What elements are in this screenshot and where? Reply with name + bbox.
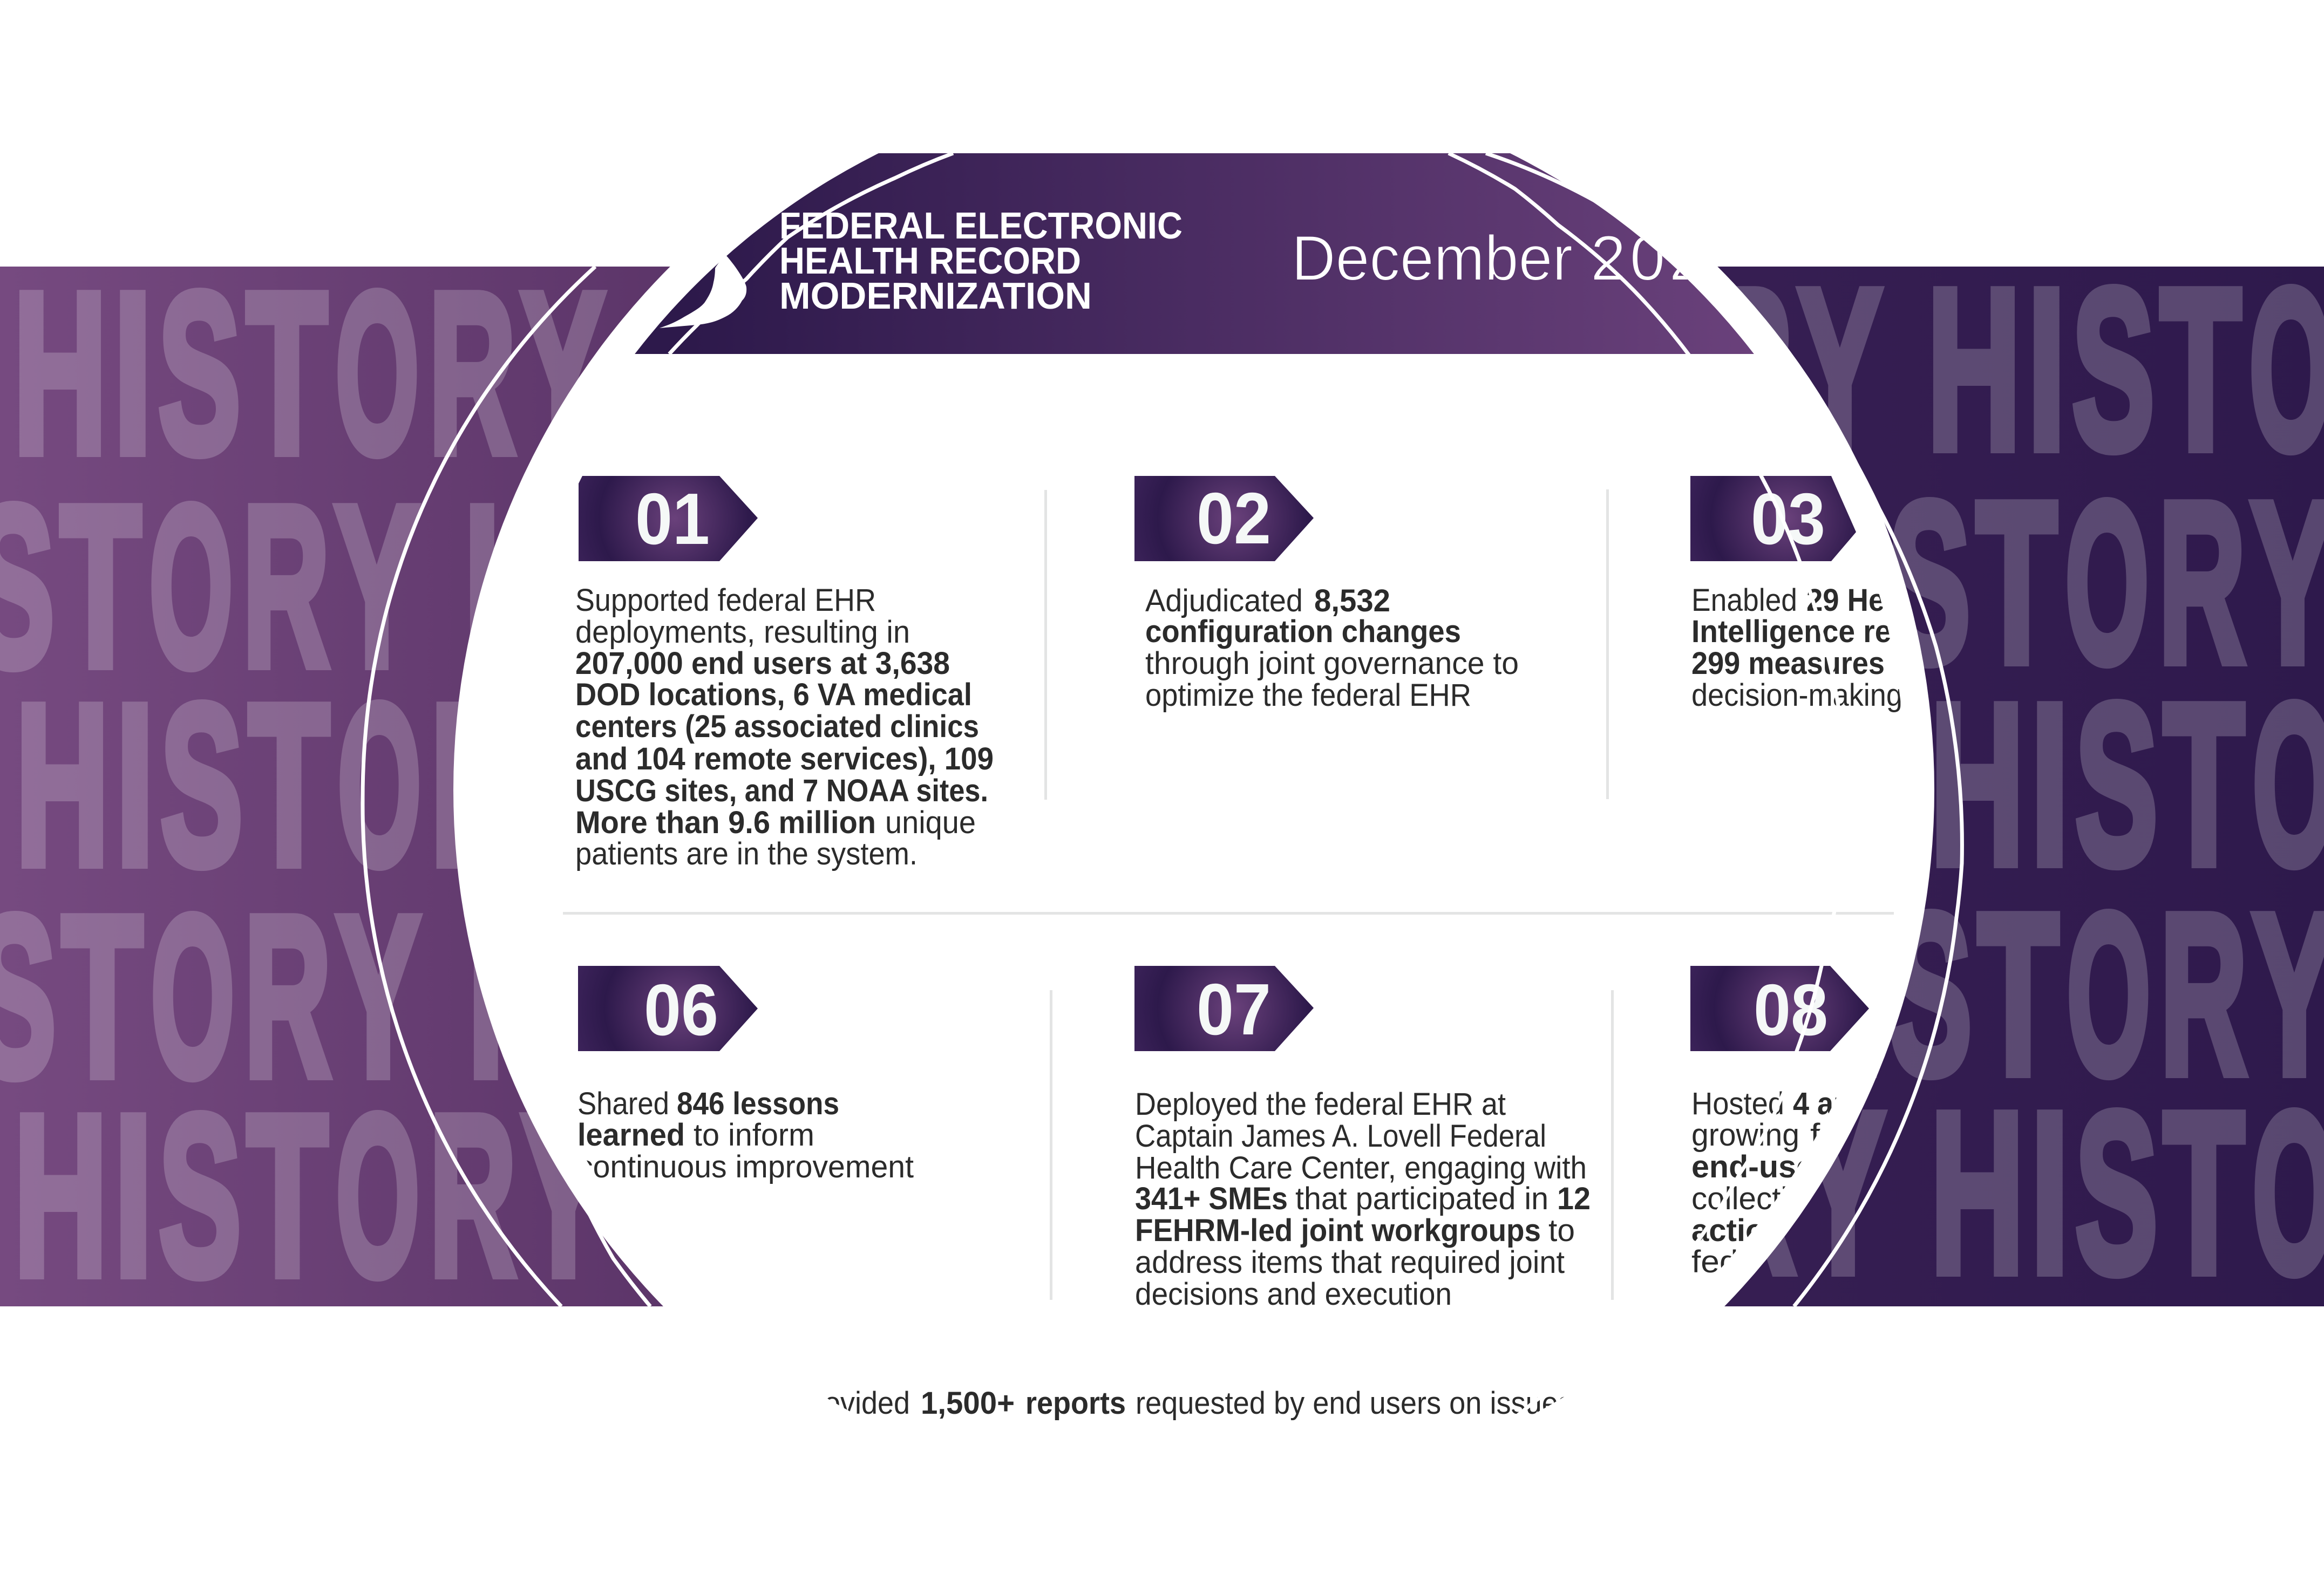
HISTORY watermark text, left side: O: [336, 1068, 420, 1324]
panel: item 01: [575, 476, 994, 871]
background purple band: [0, 267, 2324, 1306]
HISTORY watermark text, left side: T: [60, 459, 141, 714]
date: 2022: [1591, 223, 1744, 294]
HISTORY watermark text, right side: S: [1890, 867, 1972, 1122]
HISTORY watermark text, left side: S: [609, 459, 691, 714]
thin white inner arc, bottom left: [588, 1212, 650, 1306]
HISTORY watermark text, right side: I: [1394, 657, 1432, 912]
HISTORY watermark text, left side: I: [114, 246, 152, 501]
HISTORY watermark text, left side: R: [429, 1067, 517, 1323]
text 01: deployments, resulting in: [575, 615, 910, 650]
text 07: address items that required joint: [1135, 1245, 1565, 1280]
panel: item 07: [1134, 966, 1591, 1312]
HISTORY watermark text, left side: T: [697, 459, 778, 714]
thin white outer arc, left: [363, 267, 595, 1306]
HISTORY watermark text, right side: I: [2028, 242, 2065, 498]
text 08: growing: [1691, 1118, 1799, 1153]
HISTORY watermark text, right side: S: [2075, 1066, 2158, 1321]
panel: item 08: [1690, 966, 1869, 1272]
HISTORY watermark text, left side: R: [242, 458, 330, 714]
HISTORY watermark text, right side: T: [1978, 867, 2059, 1122]
HISTORY watermark text, left side: S: [613, 869, 695, 1125]
HISTORY watermark text, right side: O: [1615, 657, 1700, 912]
HISTORY watermark text, right side: R: [2160, 866, 2247, 1122]
HISTORY watermark text, left side: H: [13, 245, 107, 501]
HISTORY watermark text, right side: Y: [1615, 866, 1700, 1122]
badge 06: 06: [644, 969, 718, 1051]
text 01: Supported federal EHR: [575, 583, 876, 618]
HISTORY watermark text, right side: O: [2065, 455, 2149, 711]
HISTORY watermark text, right side: R: [1521, 454, 1609, 710]
text 02: Adjudicated: [1145, 583, 1303, 618]
HISTORY watermark text, right side: H: [1927, 241, 2021, 497]
HISTORY watermark text, left side: S: [158, 246, 241, 501]
HISTORY watermark text, right side: T: [1341, 867, 1422, 1122]
date: [1297, 234, 1689, 281]
text 08: action: [1691, 1213, 1784, 1248]
text 08: 4 annual: [1793, 1086, 1911, 1121]
text 01: 207,000 end users at 3,638: [575, 646, 950, 681]
thin white arc, top right sliver: [1486, 153, 1598, 202]
badge 03: [1690, 476, 1856, 561]
HISTORY watermark text, right side: S: [1253, 867, 1335, 1122]
HISTORY watermark text, right side: I: [1208, 867, 1246, 1122]
HISTORY watermark text, right side: [1106, 241, 2324, 1321]
HISTORY watermark text, right side: R: [2158, 454, 2246, 710]
text 06: Shared: [577, 1086, 669, 1121]
text 02: 8,532: [1314, 583, 1390, 618]
text 07: [1135, 1087, 1591, 1312]
HISTORY watermark text, left side: R: [431, 657, 518, 912]
HISTORY watermark text, left side: H: [14, 1067, 107, 1323]
bottom text: reports: requested by end users on issues: [1136, 1386, 1573, 1421]
text 08: focus on: [1810, 1118, 1945, 1153]
HISTORY watermark text, right side: S: [1435, 242, 1518, 498]
HISTORY watermark text, right side: T: [1526, 657, 1608, 912]
title: MODERNIZATION: [779, 275, 1092, 317]
HISTORY watermark text, left side: I: [565, 459, 602, 714]
HISTORY watermark text, left side: S: [160, 658, 243, 913]
badge 06: [578, 966, 758, 1051]
HISTORY watermark text, right side: I: [1391, 242, 1429, 498]
text 07: Deployed the federal EHR at: [1135, 1087, 1506, 1122]
HISTORY watermark text, left side: O: [151, 869, 235, 1125]
text 01: More than 9.6 million: [575, 805, 876, 840]
thin white inner arc, right: [1449, 153, 1846, 1425]
HISTORY watermark text, right side: O: [1430, 867, 1514, 1122]
text 06: learned: [577, 1118, 685, 1153]
HISTORY watermark text, left side: I: [116, 657, 154, 913]
bottom text: reports: reports: [1025, 1386, 1126, 1421]
HISTORY watermark text, left side: I: [114, 1068, 152, 1324]
HISTORY watermark text, right side: H: [1294, 656, 1387, 912]
HISTORY watermark text, right side: T: [1523, 242, 1605, 498]
text 01: DOD locations, 6 VA medical: [575, 677, 972, 712]
HISTORY watermark text, right side: I: [1844, 455, 1881, 711]
text 07: Health Care Center, engaging with: [1135, 1150, 1587, 1185]
HISTORY watermark text, right side: S: [1438, 1066, 1521, 1321]
text 07: Captain James A. Lovell Federal: [1135, 1119, 1546, 1154]
panel: item 06: [577, 966, 914, 1184]
HISTORY watermark text, right side: S: [2072, 242, 2155, 498]
HISTORY watermark text, left side: T: [62, 869, 143, 1125]
HISTORY watermark text, left side: Y: [336, 868, 420, 1124]
HISTORY watermark text, left side: H: [16, 657, 109, 912]
HISTORY watermark text, left side: I: [568, 869, 606, 1125]
HISTORY watermark text, right side: Y: [1801, 656, 1885, 912]
icon: white crescent logo: [660, 255, 746, 328]
text 08: federal: [1691, 1244, 1794, 1279]
HISTORY watermark text, right side: H: [1108, 866, 1201, 1122]
panel: item 03: [1690, 476, 1901, 712]
HISTORY watermark text, right side: T: [1339, 455, 1421, 711]
HISTORY watermark text, right side: H: [1106, 454, 1200, 710]
badge 08: [1690, 966, 1869, 1051]
text 07: decisions and execution: [1135, 1277, 1452, 1312]
HISTORY watermark text, right side: O: [1612, 242, 1696, 498]
HISTORY watermark text, left side: T: [248, 657, 330, 913]
badge 02: [1134, 476, 1314, 561]
text 06: [577, 1086, 914, 1184]
bottom text: reports: 1,500+: [921, 1386, 1015, 1421]
HISTORY watermark text, right side: T: [2160, 242, 2241, 498]
HISTORY watermark text, left side: Y: [523, 657, 607, 912]
HISTORY watermark text, left side: R: [879, 458, 967, 714]
title: [779, 205, 1183, 317]
text 03: decision-making: [1691, 678, 1902, 713]
HISTORY watermark text, right side: R: [1709, 656, 1796, 912]
HISTORY watermark text, right side: Y: [1614, 454, 1698, 710]
HISTORY watermark text, right side: T: [2163, 657, 2245, 912]
text 03: 299 measures: [1691, 646, 1885, 681]
text 02: through joint governance to: [1145, 646, 1519, 681]
HISTORY watermark text, right side: R: [1709, 1065, 1796, 1320]
HISTORY watermark text, right side: S: [1888, 455, 1970, 711]
HISTORY watermark text, right side: I: [2031, 1065, 2069, 1321]
HISTORY watermark text, left side: R: [429, 245, 516, 501]
HISTORY watermark text, right side: H: [1931, 1065, 2024, 1320]
text 03: [1693, 588, 1901, 712]
HISTORY watermark text, left side: Y: [975, 868, 1059, 1124]
text 06: to inform: [694, 1118, 814, 1153]
HISTORY watermark text, left side: H: [468, 868, 561, 1124]
bottom text: reports: [795, 1386, 1573, 1421]
HISTORY watermark text, right side: H: [1290, 241, 1384, 497]
white central circle: [453, 50, 1934, 1530]
bottom text: reports: Provided: [795, 1386, 910, 1421]
text 07: to: [1548, 1213, 1575, 1248]
HISTORY watermark text, right side: I: [1845, 867, 1883, 1122]
HISTORY watermark text, right side: T: [1976, 455, 2057, 711]
badge 07: 07: [1197, 969, 1271, 1050]
banner shape: [594, 153, 1792, 354]
text 07: FEHRM-led joint workgroups: [1135, 1213, 1541, 1248]
thin white outer arc, right: [1794, 464, 1962, 1306]
text 07: that participated in: [1295, 1181, 1548, 1216]
HISTORY watermark text, left side: H: [464, 458, 558, 714]
header banner: [594, 153, 1792, 354]
HISTORY watermark text, right side: I: [2031, 657, 2069, 912]
text 01: and 104 remote services), 109: [575, 741, 994, 776]
HISTORY watermark text, right side: H: [1745, 866, 1838, 1122]
HISTORY watermark text, right side: Y: [1801, 1065, 1885, 1320]
HISTORY watermark text, right side: T: [1526, 1065, 1608, 1321]
text 02: configuration changes: [1145, 614, 1461, 649]
HISTORY watermark text, left side: Y: [335, 458, 419, 714]
HISTORY watermark text, right side: S: [2075, 657, 2158, 912]
HISTORY watermark text, right side: R: [1523, 866, 1611, 1122]
text 03: 29 Health: [1806, 583, 1937, 618]
HISTORY watermark text, left side: S: [159, 1068, 241, 1324]
text 07: 12: [1557, 1181, 1591, 1216]
HISTORY watermark text, right side: O: [1428, 455, 1512, 711]
text 08: Hosted: [1691, 1086, 1784, 1121]
badge 08: 08: [1754, 969, 1828, 1051]
HISTORY watermark text, right side: O: [1615, 1065, 1700, 1321]
HISTORY watermark text, left side: O: [790, 869, 874, 1125]
grid dividers: [563, 489, 1894, 1300]
HISTORY watermark text, right side: R: [1705, 241, 1793, 497]
HISTORY watermark text, right side: S: [1251, 455, 1334, 711]
badge 03: 03: [1751, 478, 1825, 560]
date: December: [1292, 223, 1573, 294]
panel: item 02: [1134, 476, 1519, 713]
HISTORY watermark text, left side: [0, 245, 1059, 1324]
HISTORY watermark text, right side: O: [2067, 867, 2151, 1122]
title: FEDERAL ELECTRONIC: [779, 205, 1183, 247]
HISTORY watermark text, left side: R: [244, 868, 331, 1124]
text 08: collective: [1691, 1181, 1821, 1216]
text 02: [1145, 583, 1519, 713]
HISTORY watermark text, left side: R: [883, 868, 970, 1124]
text 07: 341+ SMEs: [1135, 1181, 1288, 1216]
thin white inner arc, top left: [669, 153, 953, 354]
text 01: USCG sites, and 7 NOAA sites.: [575, 773, 988, 808]
HISTORY watermark text, left side: O: [337, 657, 422, 913]
text 06: continuous improvement: [577, 1149, 914, 1184]
badge 02: 02: [1197, 478, 1271, 559]
HISTORY watermark text, left side: T: [247, 1068, 328, 1324]
text 03: Enabled: [1691, 583, 1797, 618]
HISTORY watermark text, left side: T: [246, 246, 328, 501]
badge 07: [1134, 966, 1314, 1051]
text 01: [575, 583, 994, 871]
text 02: optimize the federal EHR: [1145, 678, 1471, 713]
HISTORY watermark text, right side: Y: [1798, 241, 1882, 497]
badge 01: 01: [635, 478, 710, 560]
HISTORY watermark text, right side: H: [1294, 1065, 1387, 1320]
text 08: [1691, 1091, 1837, 1272]
HISTORY watermark text, right side: I: [1394, 1065, 1432, 1321]
HISTORY watermark text, left side: Y: [971, 458, 1056, 714]
text 03: Intelligence reports: [1691, 614, 1966, 649]
HISTORY watermark text, right side: I: [1207, 455, 1245, 711]
text 08: end-user: [1691, 1149, 1826, 1184]
HISTORY watermark text, left side: T: [701, 869, 782, 1125]
text 01: centers (25 associated clinics: [575, 709, 979, 744]
HISTORY watermark text, left side: O: [786, 459, 870, 714]
text 01: unique: [885, 805, 976, 840]
text 06: 846 lessons: [677, 1086, 839, 1121]
HISTORY watermark text, right side: H: [1743, 454, 1837, 710]
text 01: patients are in the system.: [575, 836, 918, 871]
HISTORY watermark text, left side: Y: [521, 245, 605, 501]
HISTORY watermark text, left side: Y: [521, 1067, 606, 1323]
title: HEALTH RECORD: [779, 240, 1081, 282]
HISTORY watermark text, right side: S: [1438, 657, 1521, 912]
HISTORY watermark text, left side: O: [149, 459, 233, 714]
HISTORY watermark text, left side: O: [335, 246, 419, 501]
HISTORY watermark text, right side: H: [1931, 656, 2024, 912]
HISTORY watermark text, right side: T: [2163, 1065, 2245, 1321]
badge 01: [579, 476, 758, 561]
